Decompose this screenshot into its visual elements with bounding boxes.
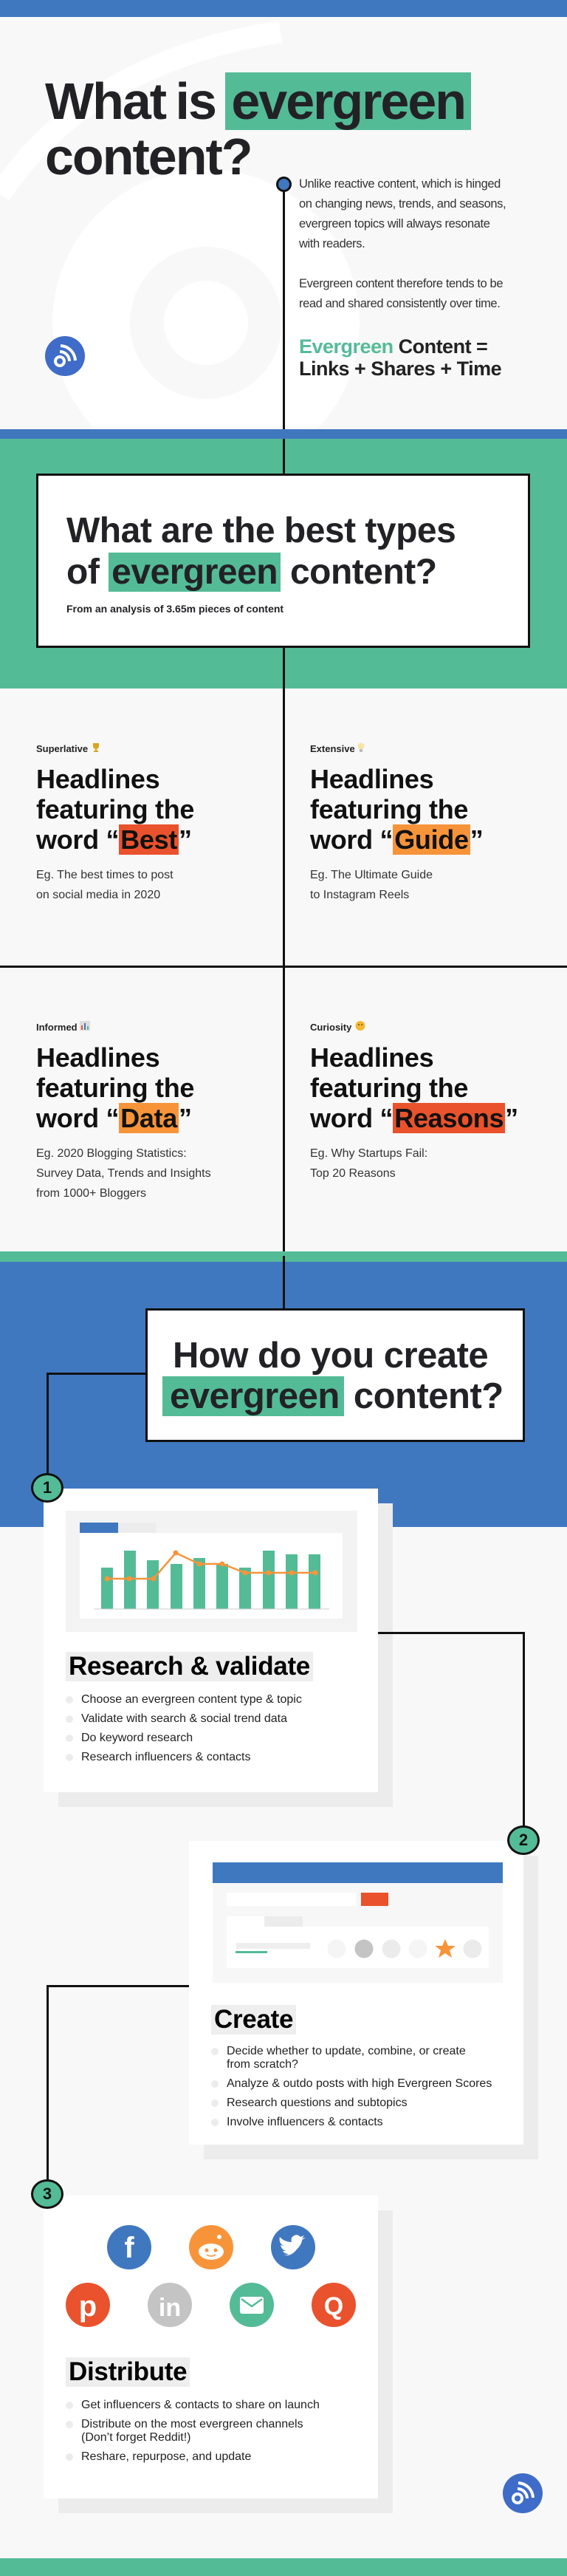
quadrant horizontal divider xyxy=(0,966,567,968)
social icons xyxy=(66,2225,356,2327)
formula: Evergreen Content = xyxy=(299,335,487,358)
bullets research: Research influencers & contacts xyxy=(81,1751,250,1763)
bullets create xyxy=(211,2045,492,2128)
connector card1 to step 2 xyxy=(369,1632,525,1840)
step 1 badge xyxy=(31,1473,63,1503)
step 2 badge xyxy=(507,1825,540,1855)
quadrant: superlative: on social media in 2020 xyxy=(36,889,160,901)
quadrant: informed: Survey Data, Trends and Insights xyxy=(36,1167,211,1180)
quadrant: curiosity: Headlines xyxy=(310,1042,433,1073)
intro paragraph xyxy=(299,177,506,310)
quadrant: superlative: featuring the xyxy=(36,794,194,824)
quadrant: curiosity xyxy=(310,1021,518,1180)
blue section xyxy=(0,1262,567,1527)
top blue bar xyxy=(0,0,567,17)
social icons: f xyxy=(124,2232,134,2264)
quadrant: informed: Eg. 2020 Blogging Statistics: xyxy=(36,1147,187,1160)
quadrant: extensive: word “Guide” xyxy=(310,824,483,855)
title: content? xyxy=(45,128,252,185)
social icons: Q xyxy=(324,2292,343,2320)
title xyxy=(45,72,471,185)
connector line top xyxy=(283,1256,285,1309)
bar chart xyxy=(66,1511,357,1632)
vertical timeline line xyxy=(283,184,285,1308)
background watermark rings xyxy=(0,17,567,429)
quadrant: superlative: word “Best” xyxy=(36,824,192,855)
bullets create: Involve influencers & contacts xyxy=(227,2116,383,2128)
quadrant: informed xyxy=(35,1021,211,1200)
bullets research xyxy=(66,1693,302,1763)
social icons: p xyxy=(79,2290,97,2323)
card 2 shadow xyxy=(204,1856,538,2159)
logo icon top xyxy=(45,336,85,376)
title: What is evergreen xyxy=(45,72,465,130)
bullets distribute xyxy=(66,2399,320,2463)
heading text: What are the best types xyxy=(66,511,456,550)
bullets research: Choose an evergreen content type & topic xyxy=(81,1693,302,1706)
step 3 badge xyxy=(31,2179,63,2209)
card 3 shadow xyxy=(58,2210,393,2513)
formula xyxy=(299,335,501,380)
quadrant: extensive xyxy=(310,743,483,901)
card 2: create xyxy=(189,1841,523,2145)
subtitle: From an analysis of 3.65m pieces of content xyxy=(66,603,284,615)
quadrant: informed: featuring the xyxy=(36,1073,194,1103)
quadrant: informed: Informed xyxy=(36,1022,78,1033)
editor mockup xyxy=(213,1862,503,1958)
bullets research: Do keyword research xyxy=(81,1732,193,1744)
bullets distribute: (Don’t forget Reddit!) xyxy=(81,2431,191,2444)
quadrant: curiosity: word “Reasons” xyxy=(310,1103,518,1133)
card 1: research & validate xyxy=(44,1489,378,1792)
heading distribute: Distribute xyxy=(69,2357,187,2386)
green stripe xyxy=(0,1251,567,1262)
quadrant: superlative: Headlines xyxy=(36,764,159,794)
vertical line over green xyxy=(283,439,285,1308)
heading text xyxy=(66,511,456,592)
connector card2 to step 3 xyxy=(47,1985,190,2196)
bullets research: Validate with search & social trend data xyxy=(81,1712,287,1725)
heading create: Create xyxy=(214,2005,293,2034)
intro paragraph: Unlike reactive content, which is hinged xyxy=(299,177,501,191)
formula: Links + Shares + Time xyxy=(299,358,501,380)
quadrant: curiosity: Curiosity xyxy=(310,1022,351,1033)
quadrant: informed: from 1000+ Bloggers xyxy=(36,1187,146,1200)
intro paragraph: read and shared consistently over time. xyxy=(299,297,500,310)
logo icon bottom xyxy=(503,2473,543,2513)
green section xyxy=(0,439,567,689)
heading research: Research & validate xyxy=(69,1652,310,1681)
intro paragraph: on changing news, trends, and seasons, xyxy=(299,197,506,211)
blue stripe xyxy=(0,429,567,439)
quadrant: curiosity: Top 20 Reasons xyxy=(310,1167,396,1180)
quadrant: curiosity: featuring the xyxy=(310,1073,468,1103)
quadrant: curiosity: Eg. Why Startups Fail: xyxy=(310,1147,427,1160)
step 3 badge: 3 xyxy=(43,2184,52,2203)
bullets create: from scratch? xyxy=(227,2058,298,2071)
heading text: of evergreen content? xyxy=(66,553,437,592)
bullets create: Research questions and subtopics xyxy=(227,2097,408,2109)
step 1 badge: 1 xyxy=(43,1478,52,1497)
timeline dot xyxy=(276,177,292,192)
box: how do you create: evergreen content? xyxy=(170,1376,504,1416)
connector to step 1 xyxy=(47,1373,147,1489)
box: how do you create: How do you create xyxy=(173,1336,488,1376)
quadrant: informed: Headlines xyxy=(36,1042,159,1073)
quadrant: superlative: Eg. The best times to post xyxy=(36,869,173,881)
intro paragraph: Evergreen content therefore tends to be xyxy=(299,277,503,290)
box: best types heading xyxy=(36,474,530,648)
intro paragraph: with readers. xyxy=(299,237,365,250)
quadrant: informed: word “Data” xyxy=(36,1103,192,1133)
bullets distribute: Distribute on the most evergreen channels xyxy=(81,2418,303,2430)
intro paragraph: evergreen topics will always resonate xyxy=(299,217,490,230)
quadrant: extensive: to Instagram Reels xyxy=(310,889,409,901)
bullets distribute: Reshare, repurpose, and update xyxy=(81,2450,251,2463)
box: how do you create xyxy=(145,1308,525,1442)
quadrant: extensive: Headlines xyxy=(310,764,433,794)
bullets create: Analyze & outdo posts with high Evergreen Scores xyxy=(227,2077,492,2090)
bottom green bar xyxy=(0,2558,567,2576)
social icons: in xyxy=(159,2294,181,2322)
quadrant: superlative: Superlative xyxy=(36,743,88,754)
quadrant: extensive: Extensive xyxy=(310,743,355,754)
quadrant: extensive: featuring the xyxy=(310,794,468,824)
card 1 shadow xyxy=(58,1503,393,1807)
bullets distribute: Get influencers & contacts to share on launch xyxy=(81,2399,320,2411)
bullets create: Decide whether to update, combine, or create xyxy=(227,2045,466,2057)
quadrant: superlative xyxy=(35,743,194,901)
step 2 badge: 2 xyxy=(519,1831,528,1849)
quadrant: extensive: Eg. The Ultimate Guide xyxy=(310,869,433,881)
card 3: distribute xyxy=(44,2196,378,2498)
